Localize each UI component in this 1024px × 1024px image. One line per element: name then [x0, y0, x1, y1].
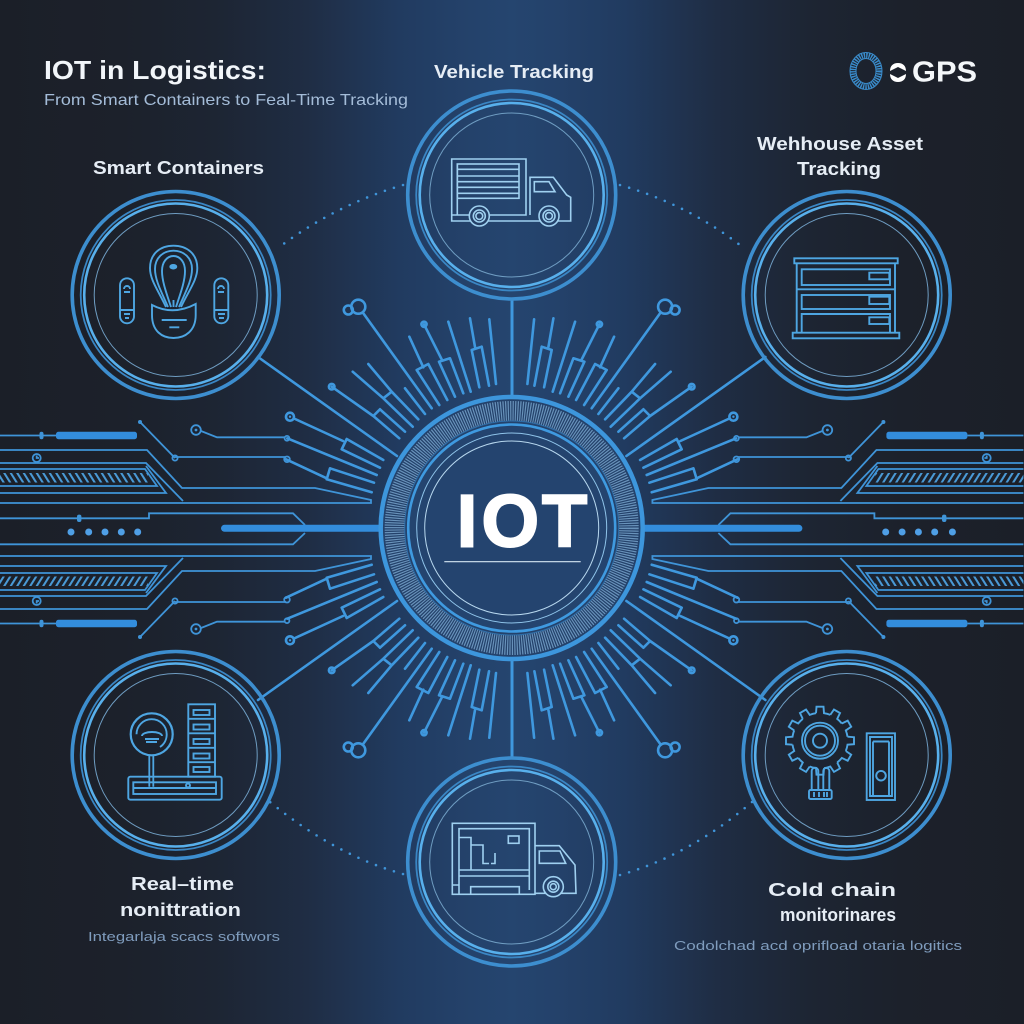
label: cold chain monitoring: Cold chain [768, 880, 896, 900]
icon: delivery truck [452, 159, 571, 226]
dotted arcs between outer nodes [270, 185, 752, 875]
icon: GPS ring [850, 52, 882, 90]
label: warehouse asset tracking: Tracking [797, 159, 881, 179]
circuit traces: lower right [652, 556, 1023, 639]
radial fan: lower right [527, 565, 765, 757]
node: bottom delivery truck [408, 758, 616, 966]
circuit traces: upper right [652, 420, 1023, 503]
hub label: IOT [457, 480, 587, 563]
icon: storage cabinet [793, 258, 899, 338]
circuit traces: upper left [0, 420, 371, 503]
icon: smart bulb with sensors [120, 246, 228, 338]
node: vehicle tracking [408, 91, 616, 299]
main title: IOT in Logistics: [44, 55, 266, 85]
label: warehouse asset tracking: Wehhouse Asset [757, 134, 923, 154]
icon: antenna and server stack [128, 704, 222, 800]
label: warehouse asset tracking [757, 134, 923, 179]
central bus: left [0, 513, 383, 544]
label: vehicle tracking: Vehicle Tracking [434, 62, 594, 82]
label: cold chain monitoring [768, 880, 896, 925]
icon: gear with chip [785, 706, 895, 800]
circuit traces: lower left [0, 556, 371, 639]
node: real-time monitoring [72, 652, 279, 858]
icon: box truck [452, 823, 576, 897]
central bus: right [640, 513, 1023, 544]
connector: top node to hub [510, 298, 514, 398]
label: cold chain monitoring: monitorinares [780, 905, 896, 925]
GPS wordmark: GPS [912, 57, 977, 89]
radial fan: upper right [527, 300, 765, 492]
hub underline [444, 561, 581, 563]
label: real-time monitoring: Real–time [131, 874, 234, 894]
central IOT hub [381, 397, 643, 659]
radial fan: upper left [258, 300, 496, 492]
subtitle: From Smart Containers to Feal-Time Tracking [44, 92, 408, 109]
label: real-time monitoring [120, 874, 241, 920]
label: real-time monitoring: nonittration [120, 900, 241, 920]
node: cold chain monitoring [743, 652, 950, 858]
radial fan: lower left [258, 565, 496, 757]
connector: bottom node to hub [510, 658, 514, 758]
caption: real-time monitoring: Integarlaja scacs softwors [88, 929, 281, 944]
node: smart containers [72, 192, 279, 398]
node: warehouse asset tracking [743, 192, 950, 398]
label: smart containers: Smart Containers [93, 158, 264, 178]
icon: GPS chevrons [890, 63, 906, 82]
GPS logo [850, 52, 977, 90]
caption: cold chain monitoring: Codolchad acd oprifload otaria logitics [674, 938, 963, 953]
